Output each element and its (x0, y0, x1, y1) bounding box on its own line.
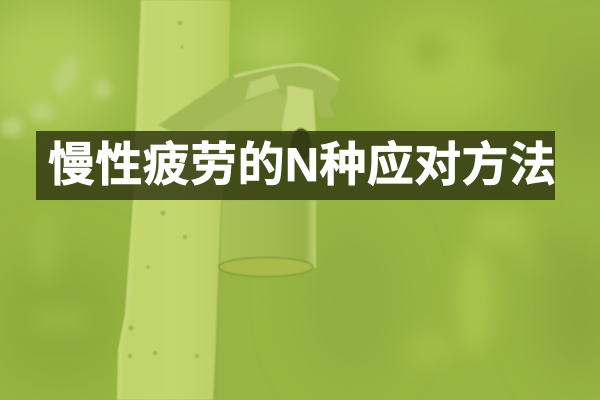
tube body (220, 200, 316, 268)
tree trunk (117, 0, 230, 400)
title text: 慢性疲劳的N种应对方法 (48, 138, 556, 191)
birdhouse (158, 63, 340, 276)
entrance hole (291, 128, 311, 162)
bottom rim (219, 258, 313, 276)
roof (158, 63, 340, 131)
title banner (36, 131, 555, 200)
